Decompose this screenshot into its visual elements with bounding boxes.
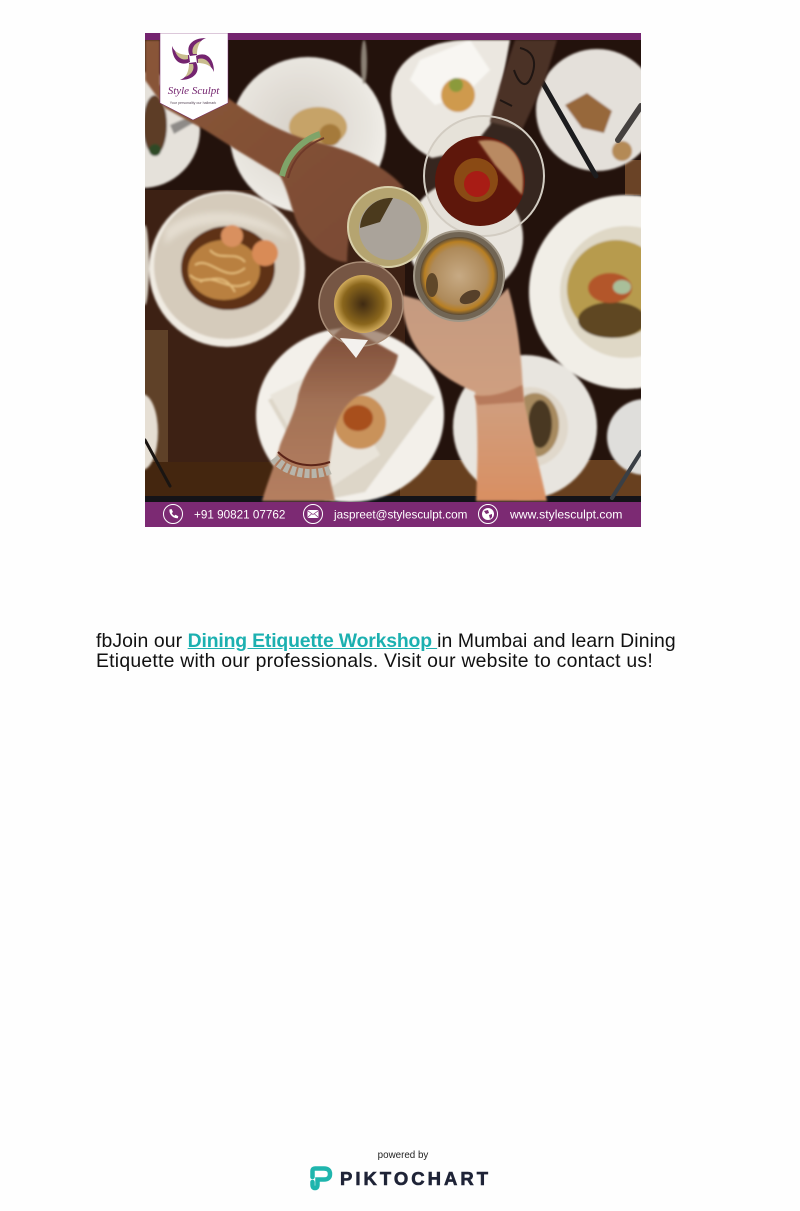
logo name: Style Sculpt <box>168 85 220 97</box>
contact banner <box>145 502 641 527</box>
whisky glass <box>319 262 403 358</box>
icon: logo swirl <box>172 38 214 80</box>
phone number: +91 90821 07762 <box>194 508 285 522</box>
icon: phone <box>164 504 182 524</box>
top banner strip <box>145 33 641 40</box>
cutlery <box>145 78 641 498</box>
body text with workshop link: Etiquette with our professionals. Visit our website to contact us! <box>96 650 653 672</box>
clear glass <box>348 187 428 267</box>
wooden table <box>145 33 641 527</box>
icon: email <box>304 504 322 524</box>
icon: piktochart mark <box>312 1168 330 1188</box>
wordmark: PIKTOCHART <box>340 1168 489 1189</box>
plates <box>84 40 723 502</box>
martini glass <box>424 116 544 236</box>
website address: www.stylesculpt.com <box>509 508 622 522</box>
powered by label: powered by <box>378 1150 428 1161</box>
wristbands <box>274 134 330 474</box>
body text with workshop link: fbJoin our Dining Etiquette Workshop in Mumbai and learn Dining <box>96 630 676 652</box>
icon: globe <box>478 504 498 524</box>
logo badge <box>160 33 228 120</box>
piktochart logo <box>310 1166 489 1190</box>
email address: jaspreet@stylesculpt.com <box>333 508 467 522</box>
beer glass <box>414 231 504 321</box>
arms and hands <box>145 40 557 501</box>
restaurant table photo with branded banners <box>145 33 641 527</box>
body text with workshop link <box>96 630 676 672</box>
logo tagline: Your personality our hallmark <box>170 101 216 105</box>
